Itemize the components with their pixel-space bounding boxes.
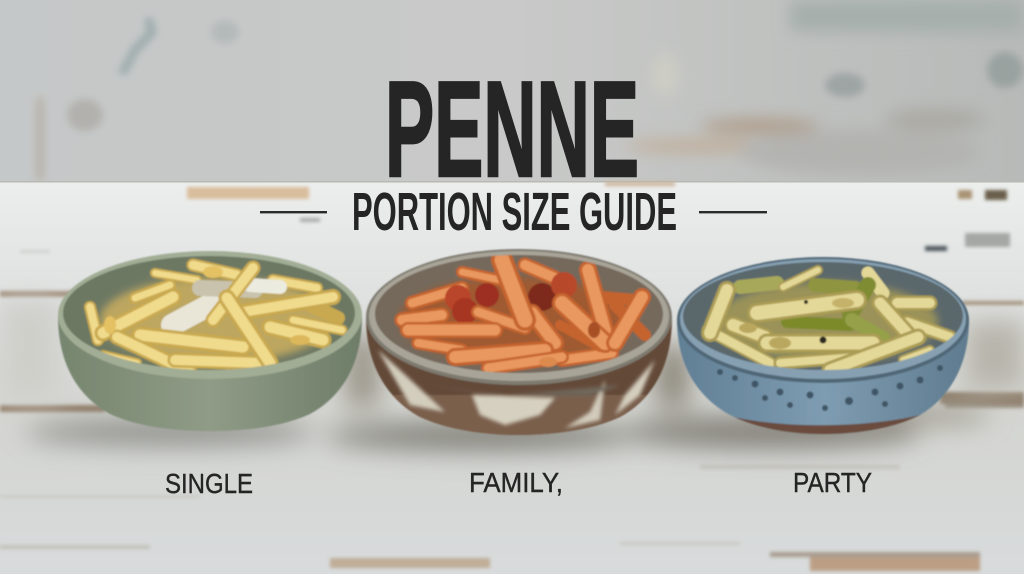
bowl interior: green [63,256,355,370]
label: party: PARTY [793,467,872,498]
label: single: SINGLE [165,468,253,499]
pasta: tomato penne [399,260,645,368]
divider left [260,211,327,213]
title: PENNE: PENNE [385,53,639,205]
wood seams and stains [0,182,1024,571]
bowl rim: blue [677,257,969,383]
bowl interior: speckled [375,255,663,373]
bowl interior: blue [683,262,963,370]
bowl body: blue glaze [676,322,970,435]
bowl body: green [58,316,362,431]
panel: single bowl [58,251,362,431]
bowl rim: stoneware [366,249,672,385]
subtitle: portion size guide: PORTION SIZE GUIDE [352,182,677,242]
label: family: FAMILY, [469,467,563,498]
divider right [699,211,767,213]
panel: party bowl [670,257,980,444]
pasta: pesto penne [708,270,950,370]
bowl body: brown and white glaze [365,319,673,436]
bowl rim: green [58,251,362,379]
pasta: creamy penne [90,265,342,372]
panel: family bowl [360,249,680,440]
